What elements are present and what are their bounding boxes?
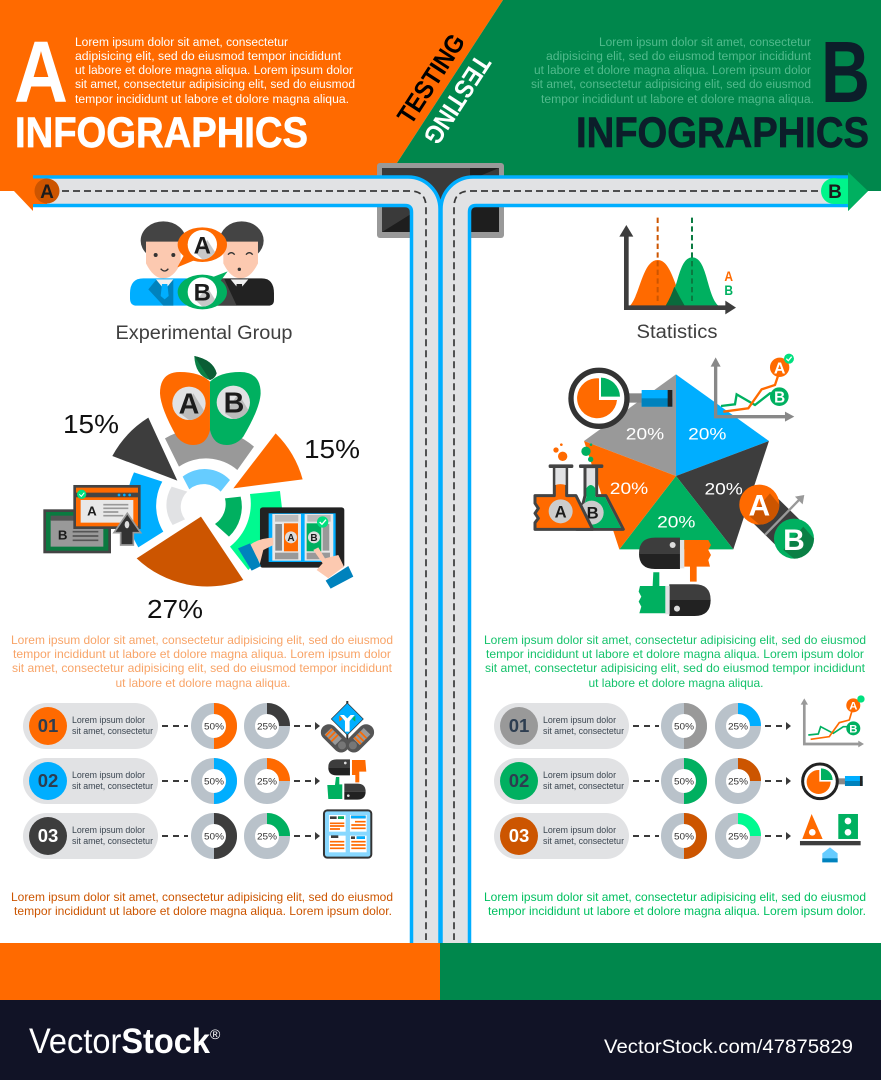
icon: tablet with hands: B: [310, 533, 318, 544]
row A3: [23, 813, 320, 859]
text block: left footer: Lorem ipsum dolor sit amet, consectetur adipisicing elit, sed do eiusmod: [11, 890, 393, 904]
icon: statistics chart: B: [724, 282, 733, 298]
watermark bar: [0, 1000, 881, 1080]
icon: tablet pages: [324, 810, 371, 858]
road marker A: [33, 178, 60, 204]
icon: apple: [160, 356, 261, 445]
icon: experimental group people: B: [194, 280, 211, 307]
segment: dark wedge: [112, 418, 177, 481]
icon: small thumbs: [327, 759, 366, 800]
segment: brown wedge: [137, 517, 243, 586]
segment: gray ring: [165, 428, 254, 470]
road from B: [441, 177, 848, 943]
row B3: sit amet, consectetur: [543, 836, 624, 846]
text block: left description: sit amet, consectetur adipisicing elit, sed do eiusmod tempor incididunt: [12, 661, 393, 675]
paragraph B: adipisicing elit, sed do eiusmod tempor incididunt: [546, 49, 812, 63]
icon: browser windows: B: [58, 527, 68, 542]
row A3: 50%: [204, 832, 225, 842]
icon: balance scale: [800, 814, 861, 862]
icon: flasks: B: [587, 504, 599, 523]
label: 15% left: 15%: [63, 409, 119, 439]
row B3: 25%: [728, 832, 749, 842]
road from A: [33, 177, 440, 943]
labels: 20%: 20%: [688, 424, 727, 443]
text block: right footer: [484, 890, 866, 918]
road junction gray block: [377, 163, 504, 238]
rotated label TESTING black: TESTING: [391, 28, 471, 129]
label: 27%: 27%: [147, 594, 203, 624]
text block: right description: sit amet, consectetur adipisicing elit, sed do eiusmod tempor incididunt: [485, 661, 866, 675]
row A2: Lorem ipsum dolor: [72, 770, 145, 780]
text block: right description: ut labore et dolore magna aliqua.: [588, 676, 764, 690]
text block: right description: tempor incididunt ut labore et dolore magna aliqua. Lorem ipsum dolor: [486, 647, 864, 661]
paragraph B: Lorem ipsum dolor sit amet, consectetur: [599, 35, 811, 49]
row A2: 25%: [257, 776, 278, 788]
row B2: [494, 758, 791, 804]
row A1: Lorem ipsum dolor: [72, 715, 145, 725]
row B2: sit amet, consectetur: [543, 781, 624, 791]
segment: blue ring: [127, 472, 163, 547]
text block: left footer: [11, 890, 393, 918]
title INFOGRAPHICS A: INFOGRAPHICS: [15, 109, 308, 157]
text block: left description: [11, 633, 393, 690]
icon: line chart: B: [774, 389, 785, 406]
segment: light blue ring: [183, 469, 230, 492]
paragraph A: Lorem ipsum dolor sit amet, consectetur: [75, 35, 288, 49]
text block: left description: Lorem ipsum dolor sit amet, consectetur adipisicing elit, sed do eiusmod: [11, 633, 393, 647]
row B1: 01: [509, 715, 529, 736]
icon: magnifier: [571, 370, 672, 426]
labels: 20%: 20%: [626, 424, 664, 443]
row A3: 03: [38, 825, 58, 846]
text block: left footer: tempor incididunt ut labore et dolore magna aliqua. Lorem ipsum dolor.: [14, 904, 392, 918]
row A1: 50%: [204, 722, 225, 732]
rotated label TESTING white: TESTING: [418, 50, 497, 150]
icon: experimental group people: A: [194, 232, 211, 259]
registered mark: ®: [210, 1026, 221, 1042]
icon: thumbs down and up: [639, 538, 711, 616]
icon: line chart: [711, 354, 794, 422]
paragraph A: tempor incididunt ut labore et dolore magna aliqua.: [75, 92, 349, 106]
text block: right footer: Lorem ipsum dolor sit amet, consectetur adipisicing elit, sed do eiusmod: [484, 890, 866, 904]
icon: flasks: A: [555, 503, 567, 522]
row A3: sit amet, consectetur: [72, 836, 153, 846]
icon: A to B capsule: [739, 485, 814, 559]
row B3: 03: [509, 825, 529, 846]
icon: small line chart: [801, 695, 865, 747]
text block: left description: ut labore et dolore magna aliqua.: [116, 676, 290, 690]
row A1: 01: [38, 715, 58, 736]
icon: A to B capsule: A: [748, 490, 770, 523]
paragraph B: ut labore et dolore magna aliqua. Lorem ipsum dolor: [534, 63, 811, 77]
road marker B with arrow: B: [828, 182, 842, 203]
big letter A: A: [14, 24, 68, 121]
row B3: Lorem ipsum dolor: [543, 825, 616, 835]
icon: statistics chart: A: [724, 268, 733, 284]
row B2: Lorem ipsum dolor: [543, 770, 616, 780]
icon: line chart: A: [774, 360, 786, 377]
chart: pentagon pie B: [535, 354, 814, 616]
icon: A to B capsule: B: [783, 524, 805, 557]
bottom band orange: [0, 943, 440, 1000]
labels: 20%: 20%: [704, 479, 743, 498]
road marker A: A: [40, 182, 54, 203]
watermark url: VectorStock.com/47875829: [604, 1036, 853, 1058]
paragraph B: tempor incididunt ut labore et dolore magna aliqua.: [541, 92, 814, 106]
labels: 20%: [610, 424, 743, 531]
heading: Statistics: Statistics: [636, 322, 718, 343]
icon: statistics chart: [619, 218, 736, 314]
text block: right description: [484, 633, 866, 690]
row A2: 02: [38, 770, 58, 791]
row B2: 50%: [674, 776, 695, 788]
segment: bright green ring: [230, 491, 285, 570]
segment: orange wedge: [233, 433, 303, 488]
icon: apple: B: [224, 388, 244, 420]
paragraph B: [531, 35, 814, 106]
icon: small line chart: A: [849, 701, 857, 713]
icon: tablet with hands: A: [287, 533, 295, 544]
icon: signpost and shoes: [318, 701, 377, 756]
labels: 20%: 20%: [610, 479, 648, 498]
paragraph B: sit amet, consectetur adipisicing elit, sed do eiusmod: [531, 77, 811, 91]
labels: 20%: 20%: [657, 512, 696, 531]
icon: browser windows: A: [87, 503, 97, 518]
row B1: 25%: [728, 722, 749, 732]
segment: light gray ring: [166, 487, 187, 525]
icon: experimental group people: [130, 221, 274, 309]
paragraph A: [75, 35, 355, 106]
row A1: [23, 703, 320, 749]
text block: left description: tempor incididunt ut labore et dolore magna aliqua. Lorem ipsum dolor: [13, 647, 391, 661]
icon: browser windows: [45, 486, 141, 552]
chart: sunburst pie A: [45, 356, 353, 589]
road marker B with arrow: [821, 172, 868, 211]
icon: tablet with hands: [238, 507, 353, 589]
row A1: sit amet, consectetur: [72, 726, 153, 736]
row B2: 02: [509, 770, 529, 791]
row B2: 25%: [728, 776, 749, 788]
row B3: 50%: [674, 832, 695, 842]
row A3: Lorem ipsum dolor: [72, 825, 145, 835]
paragraph A: adipisicing elit, sed do eiusmod tempor incididunt: [75, 49, 342, 63]
paragraph A: ut labore et dolore magna aliqua. Lorem ipsum dolor: [75, 63, 353, 77]
row A2: [23, 758, 320, 804]
row A1: 25%: [257, 722, 278, 732]
icon: small line chart: B: [849, 724, 857, 736]
segment: green ring: [215, 497, 242, 537]
bottom band green: [440, 943, 881, 1000]
row B1: sit amet, consectetur: [543, 726, 624, 736]
header: orange panel A: [0, 0, 503, 211]
header: green panel B: [395, 0, 881, 211]
row B1: 50%: [674, 722, 695, 732]
row A2: sit amet, consectetur: [72, 781, 153, 791]
paragraph A: sit amet, consectetur adipisicing elit, sed do eiusmod: [75, 77, 355, 91]
icon: flasks: [535, 443, 623, 529]
row B1: [494, 703, 791, 749]
icon: small magnifier: [803, 764, 863, 799]
row A2: 50%: [204, 776, 225, 788]
row B3: [494, 813, 791, 859]
heading: Experimental Group: Experimental Group: [116, 323, 292, 344]
icon: apple: A: [179, 388, 199, 420]
label: 15% right: 15%: [304, 434, 360, 464]
watermark logo: VectorStock: [29, 1022, 210, 1061]
row B1: Lorem ipsum dolor: [543, 715, 616, 725]
text block: right description: Lorem ipsum dolor sit amet, consectetur adipisicing elit, sed do eiusmod: [484, 633, 866, 647]
text block: right footer: tempor incididunt ut labore et dolore magna aliqua. Lorem ipsum dolor.: [488, 904, 866, 918]
row A3: 25%: [257, 832, 278, 842]
